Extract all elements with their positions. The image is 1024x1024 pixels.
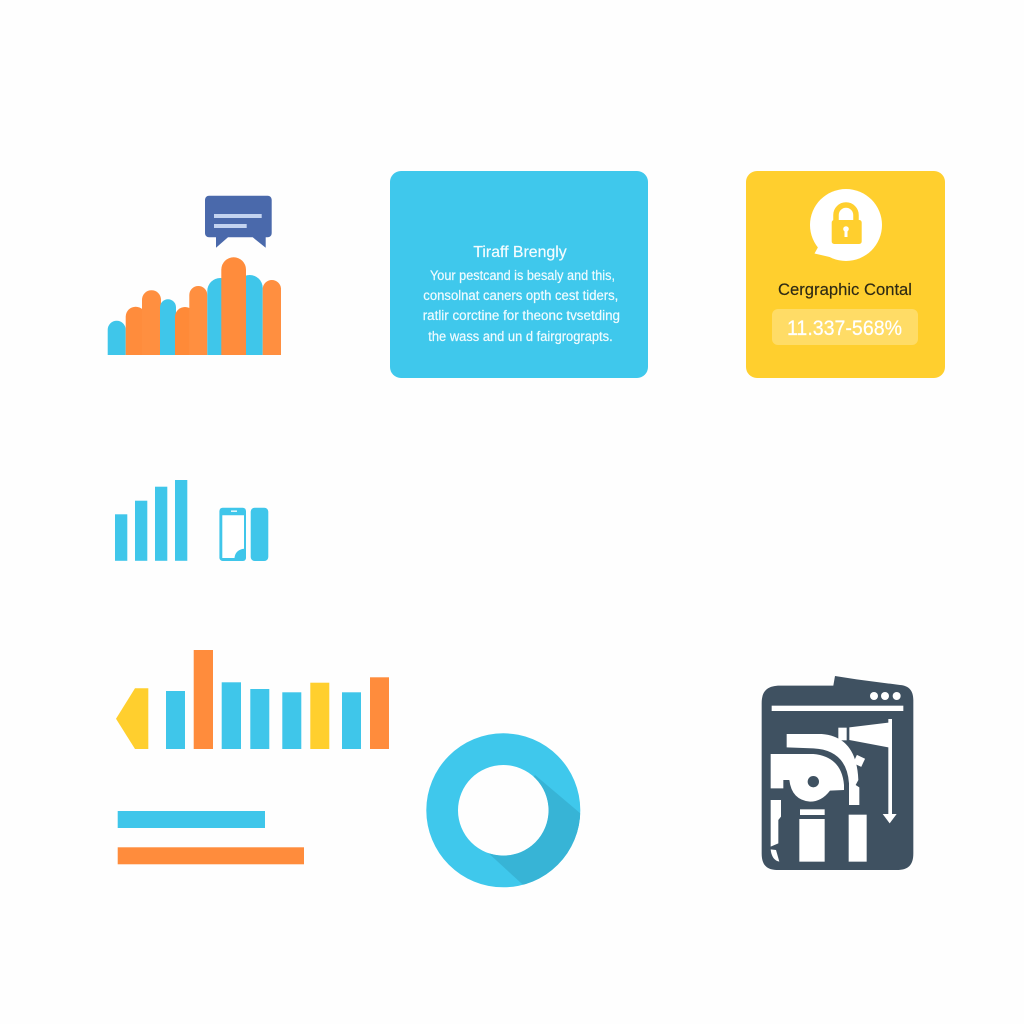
icon: phone and tablet bbox=[219, 508, 268, 561]
text block: blue card body: Your pestcand is besaly and this, bbox=[430, 268, 615, 283]
icon: padlock speech bubble bbox=[810, 189, 882, 261]
icon: speech bubble bbox=[205, 196, 272, 248]
text block: blue card body: consolnat caners opth cest tiders, bbox=[423, 288, 618, 303]
callout: value pill: 11.337-568% bbox=[787, 317, 902, 340]
icon: dark machine window bbox=[762, 676, 913, 870]
panel: blue text card bbox=[390, 171, 648, 378]
text block: blue card body: the wass and un d fairgrograpts. bbox=[428, 329, 613, 344]
panel: yellow lock card bbox=[746, 171, 945, 378]
heading: blue card: Tiraff Brengly bbox=[473, 244, 567, 261]
text block: blue card body bbox=[423, 268, 620, 344]
heading: yellow card: Cergraphic Contal bbox=[778, 281, 912, 299]
chart: overlapping rounded bars bbox=[108, 257, 281, 355]
chart: horizontal bars bbox=[118, 811, 304, 864]
chart: ascending blue bars bbox=[115, 480, 187, 561]
callout: value pill bbox=[772, 309, 918, 345]
icon: yellow left arrow bbox=[116, 688, 148, 749]
chart: donut ring bbox=[426, 733, 580, 888]
text block: blue card body: ratlir corctine for theonc tvsetding bbox=[423, 308, 620, 323]
panel: rounded bar chart with speech bubble bbox=[108, 196, 281, 355]
chart: multicolour column chart bbox=[116, 650, 389, 749]
